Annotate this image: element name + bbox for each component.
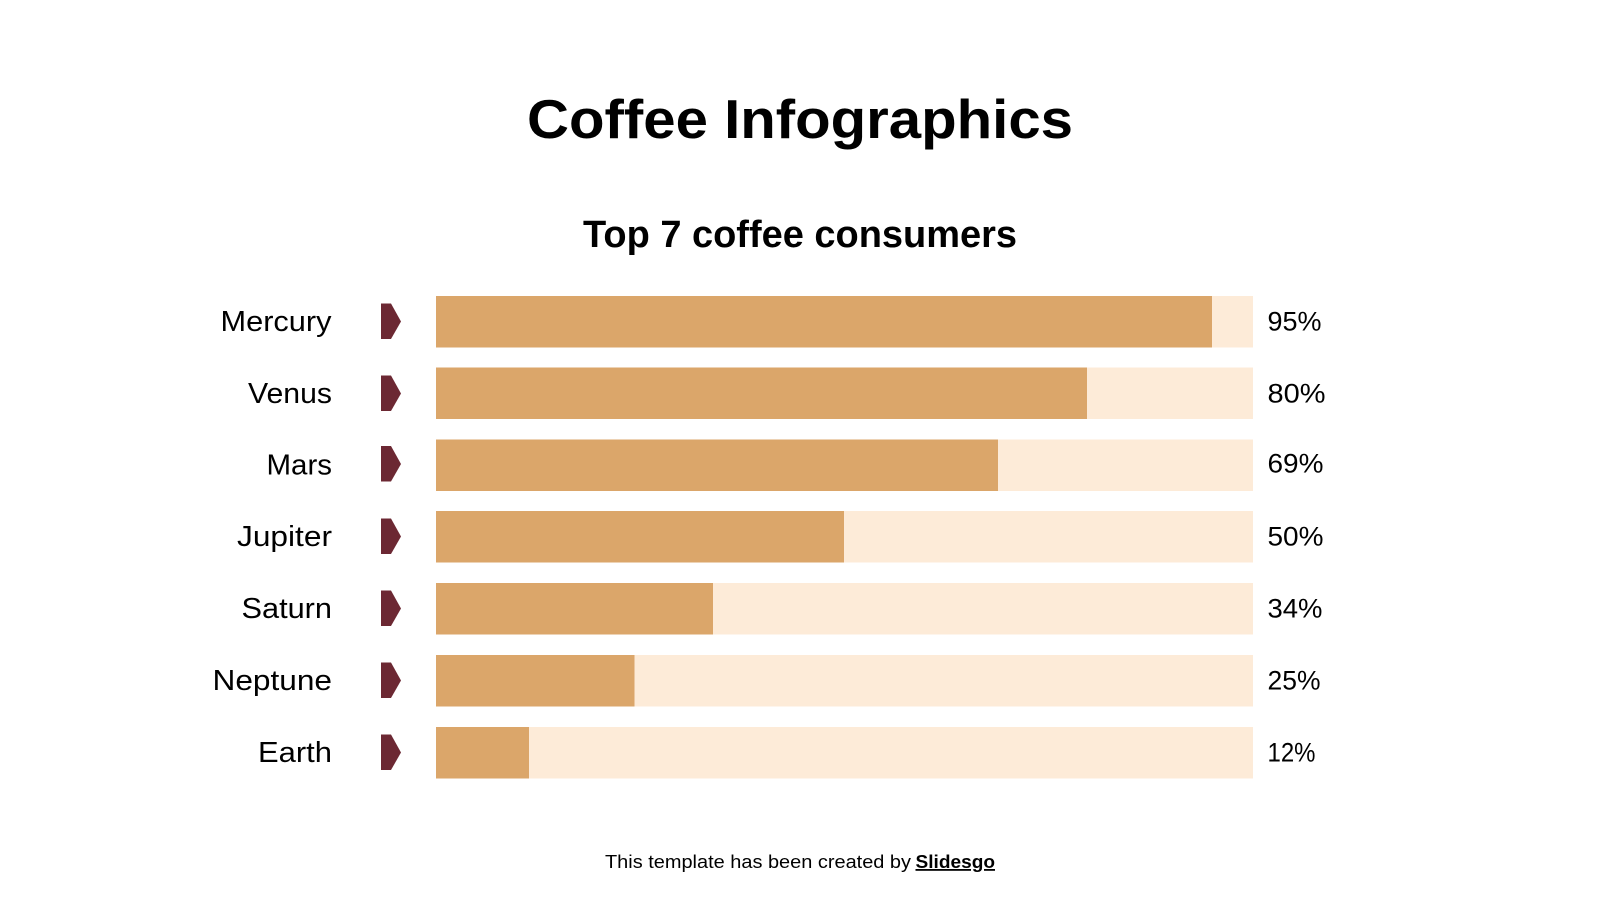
row: Mars <box>266 440 1324 491</box>
row: Venus <box>248 368 1326 419</box>
row: Neptune <box>212 655 1320 706</box>
row: Neptune: 25% <box>1268 666 1320 696</box>
row: Venus: Venus <box>248 378 332 410</box>
row: Venus: 80% <box>1268 378 1326 408</box>
bar chart <box>212 296 1326 778</box>
subtitle: Top 7 coffee consumers <box>583 214 1017 256</box>
row: Mercury: Mercury <box>220 306 332 338</box>
row: Mercury: 95% <box>1268 306 1322 336</box>
row: Jupiter: 50% <box>1268 522 1324 552</box>
row: Neptune: Neptune <box>212 665 332 697</box>
row: Mars: Mars <box>266 450 332 482</box>
footer credit: Slidesgo <box>916 852 995 872</box>
row: Saturn <box>242 583 1322 634</box>
row: Jupiter: Jupiter <box>237 521 333 553</box>
row: Earth <box>258 727 1316 778</box>
row: Jupiter <box>237 511 1324 562</box>
row: Earth: 12% <box>1268 738 1316 768</box>
row: Earth: Earth <box>258 737 332 769</box>
footer credit: This template has been created by <box>605 852 911 872</box>
row: Mars: 69% <box>1268 448 1324 478</box>
title: Coffee Infographics <box>527 88 1073 150</box>
row: Mercury <box>220 296 1322 348</box>
row: Saturn: 34% <box>1268 594 1322 624</box>
row: Saturn: Saturn <box>242 593 332 625</box>
